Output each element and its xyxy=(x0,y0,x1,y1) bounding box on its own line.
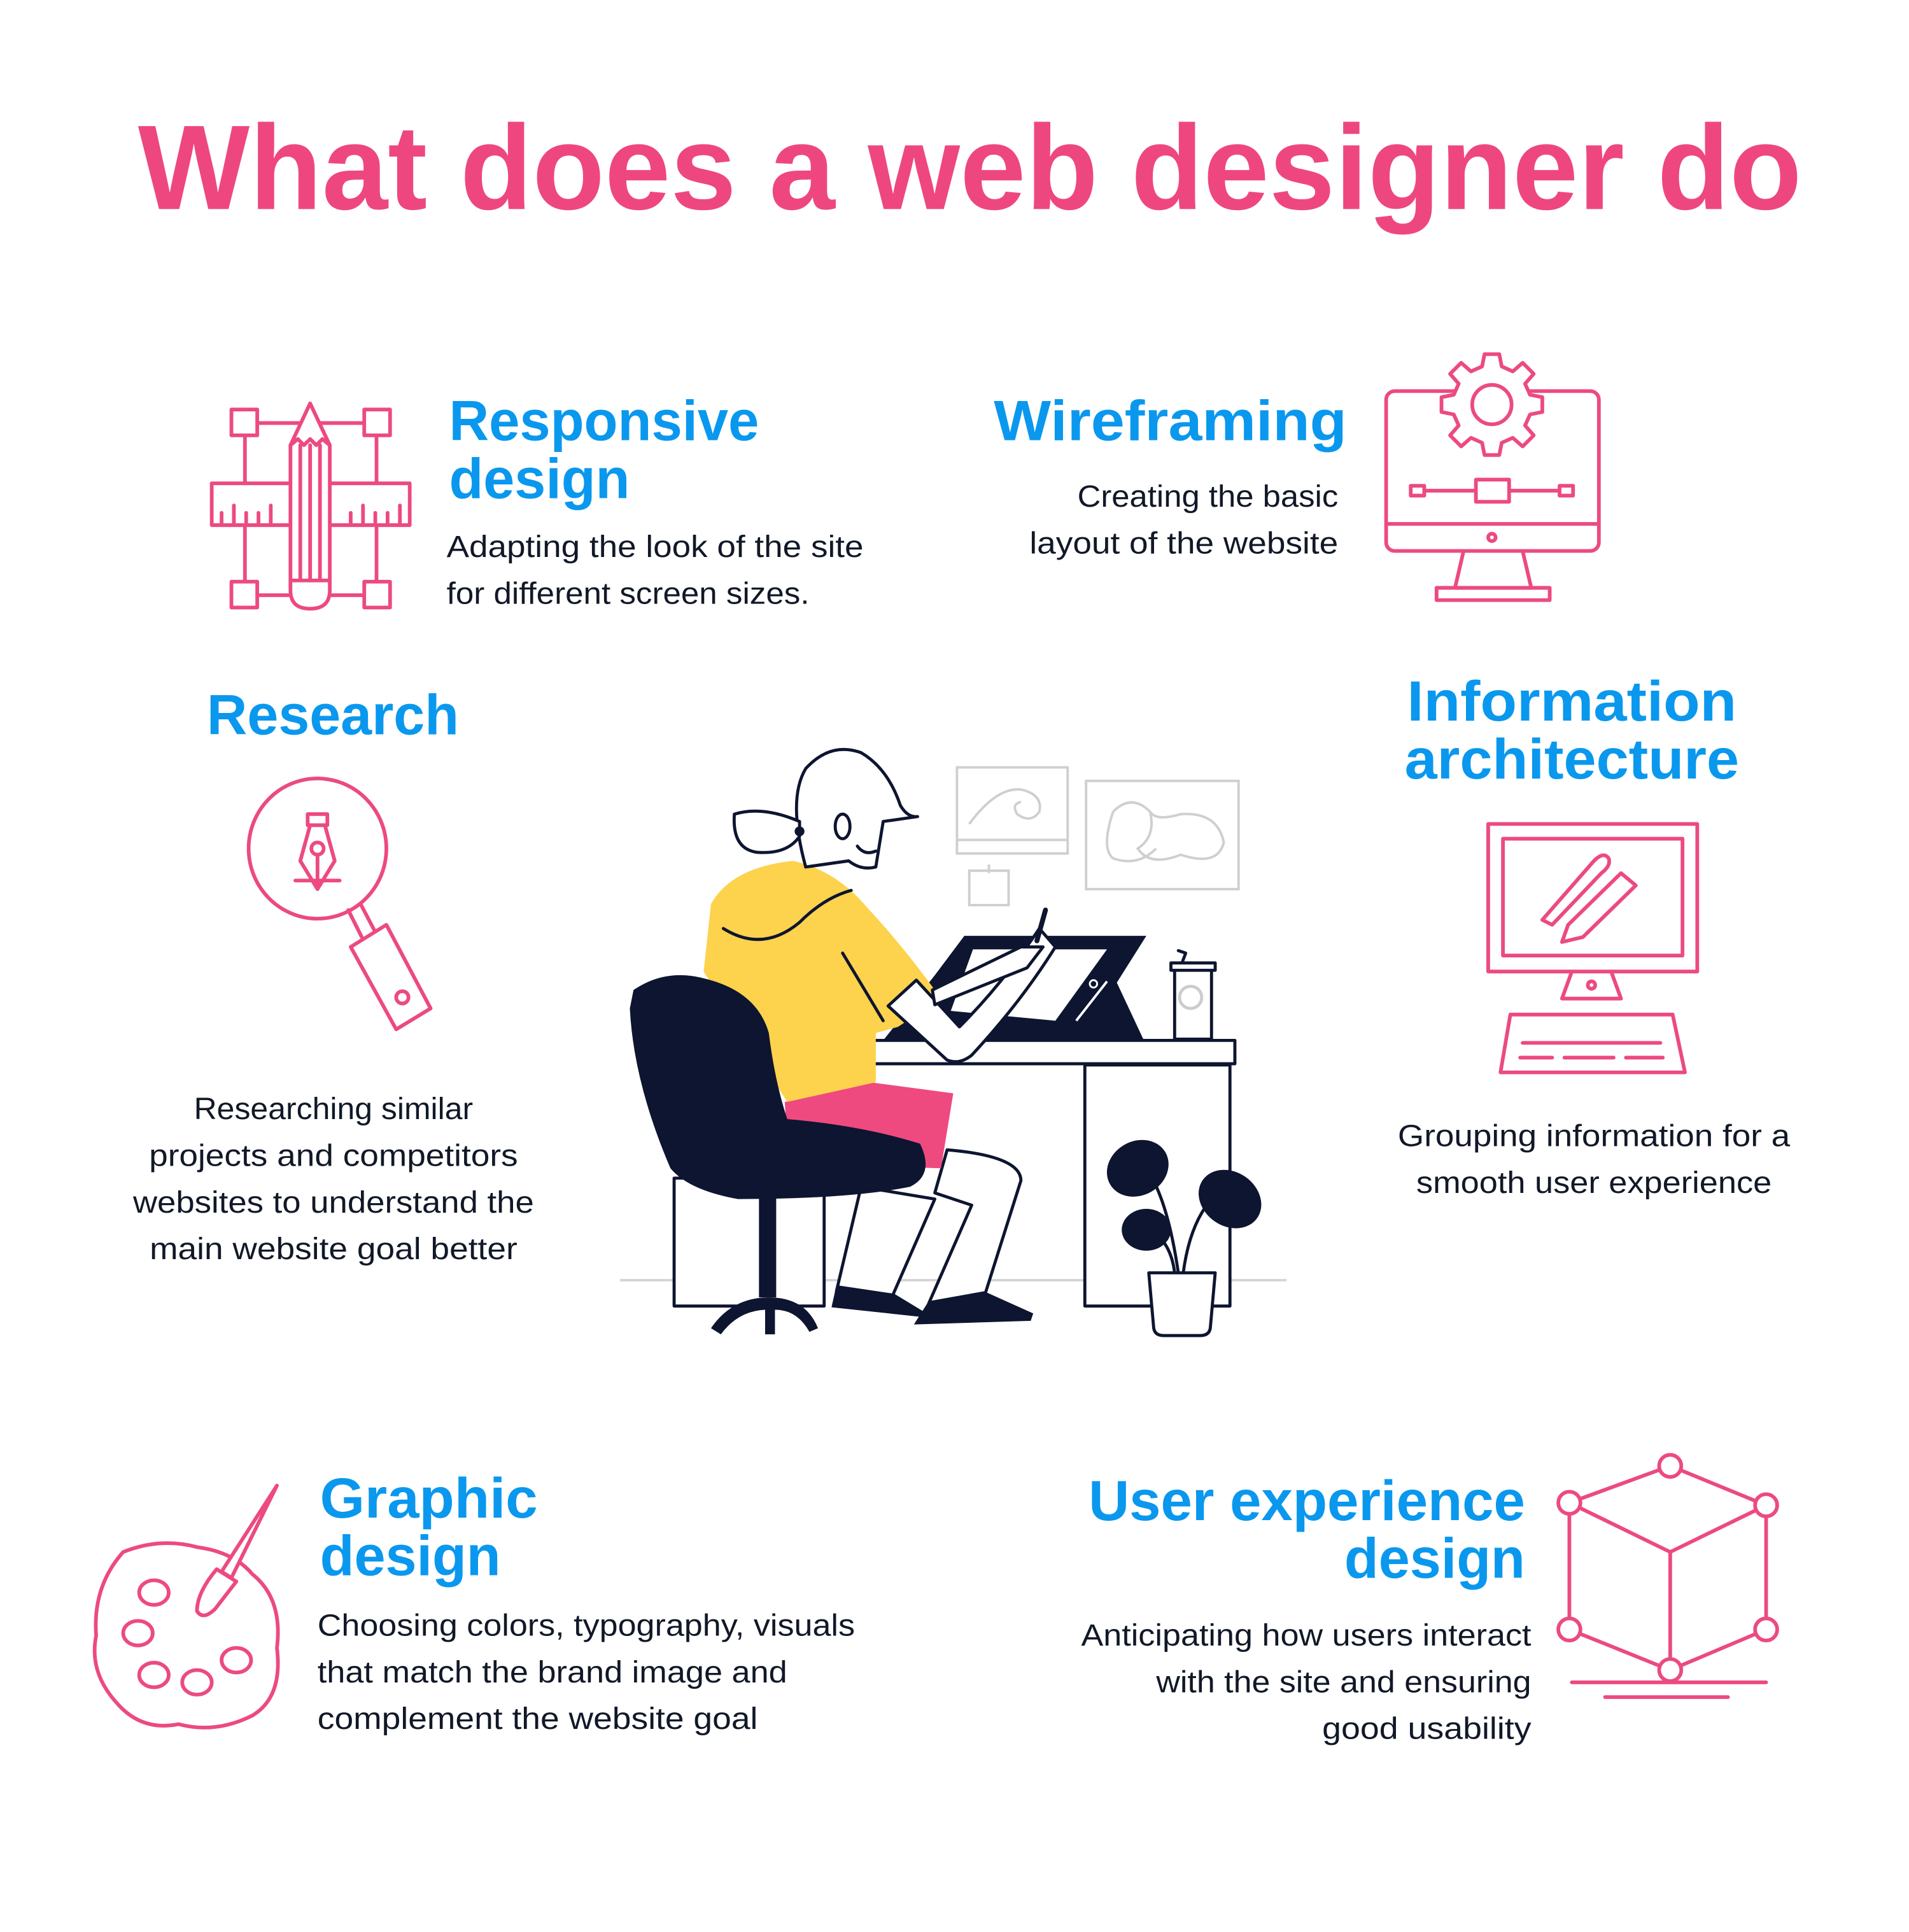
shoes xyxy=(831,1285,935,1318)
icon: monitor with gear xyxy=(1386,354,1599,600)
heading: graphic design: design xyxy=(320,1525,501,1588)
illustration: designer at desk xyxy=(620,749,1286,1336)
icon: desktop computer xyxy=(1488,824,1697,1073)
text: information architecture description: Grouping information for a xyxy=(1398,1119,1790,1153)
desk xyxy=(674,1040,1235,1306)
floor line xyxy=(620,1280,1286,1281)
panel: graphic design xyxy=(95,1467,855,1736)
panel: wireframing xyxy=(994,354,1599,600)
head xyxy=(734,749,918,868)
icon: palette and brush xyxy=(95,1486,278,1728)
title: What does a web designer do xyxy=(138,101,1802,235)
text: wireframing description: layout of the website xyxy=(1029,526,1338,560)
icon: pencil and ruler xyxy=(212,404,410,609)
text: research description: websites to understand the xyxy=(132,1185,534,1220)
legs xyxy=(836,1150,1021,1304)
text: ux description: with the site and ensuring xyxy=(1155,1665,1532,1699)
text: graphic design description: Choosing colors, typography, visuals xyxy=(318,1608,855,1642)
text: ux description: Anticipating how users interact xyxy=(1081,1618,1532,1653)
cup xyxy=(1171,950,1215,1039)
text: graphic design description: complement the website goal xyxy=(318,1702,757,1736)
text: wireframing description: Creating the basic xyxy=(1078,479,1338,514)
heading: user experience design: design xyxy=(1344,1527,1525,1590)
shirt xyxy=(703,861,941,1102)
icon: magnifier with pen nib xyxy=(249,779,431,1029)
text: research description: Researching similar xyxy=(194,1092,473,1126)
panel: user experience design xyxy=(1081,1455,1777,1746)
heading: research: Research xyxy=(207,683,459,746)
heading: graphic design: Graphic xyxy=(320,1467,538,1530)
heading: wireframing: Wireframing xyxy=(994,390,1347,453)
panel: responsive design xyxy=(212,390,864,611)
text: responsive description: Adapting the look of the site xyxy=(447,530,864,564)
heading: information architecture: Information xyxy=(1407,670,1736,733)
text: ux description: good usability xyxy=(1322,1712,1532,1746)
panel: research xyxy=(132,683,534,1266)
icon: cube xyxy=(1558,1455,1777,1697)
text: research description: main website goal better xyxy=(150,1232,518,1266)
wall frames xyxy=(957,767,1239,905)
text: responsive description: for different screen sizes. xyxy=(447,577,810,611)
heading: responsive design: design xyxy=(449,447,630,510)
shorts xyxy=(785,1082,954,1168)
text: information architecture description: smooth user experience xyxy=(1416,1166,1772,1200)
heading: user experience design: User experience xyxy=(1088,1469,1525,1532)
tablet xyxy=(883,936,1146,1040)
arm xyxy=(888,929,1055,1062)
text: research description: projects and competitors xyxy=(149,1138,518,1173)
panel: information architecture xyxy=(1398,670,1790,1200)
chair xyxy=(630,975,926,1334)
heading: information architecture: architecture xyxy=(1405,728,1739,791)
plant xyxy=(1097,1129,1272,1336)
heading: responsive design: Responsive xyxy=(449,390,759,453)
text: graphic design description: that match the brand image and xyxy=(318,1655,787,1689)
